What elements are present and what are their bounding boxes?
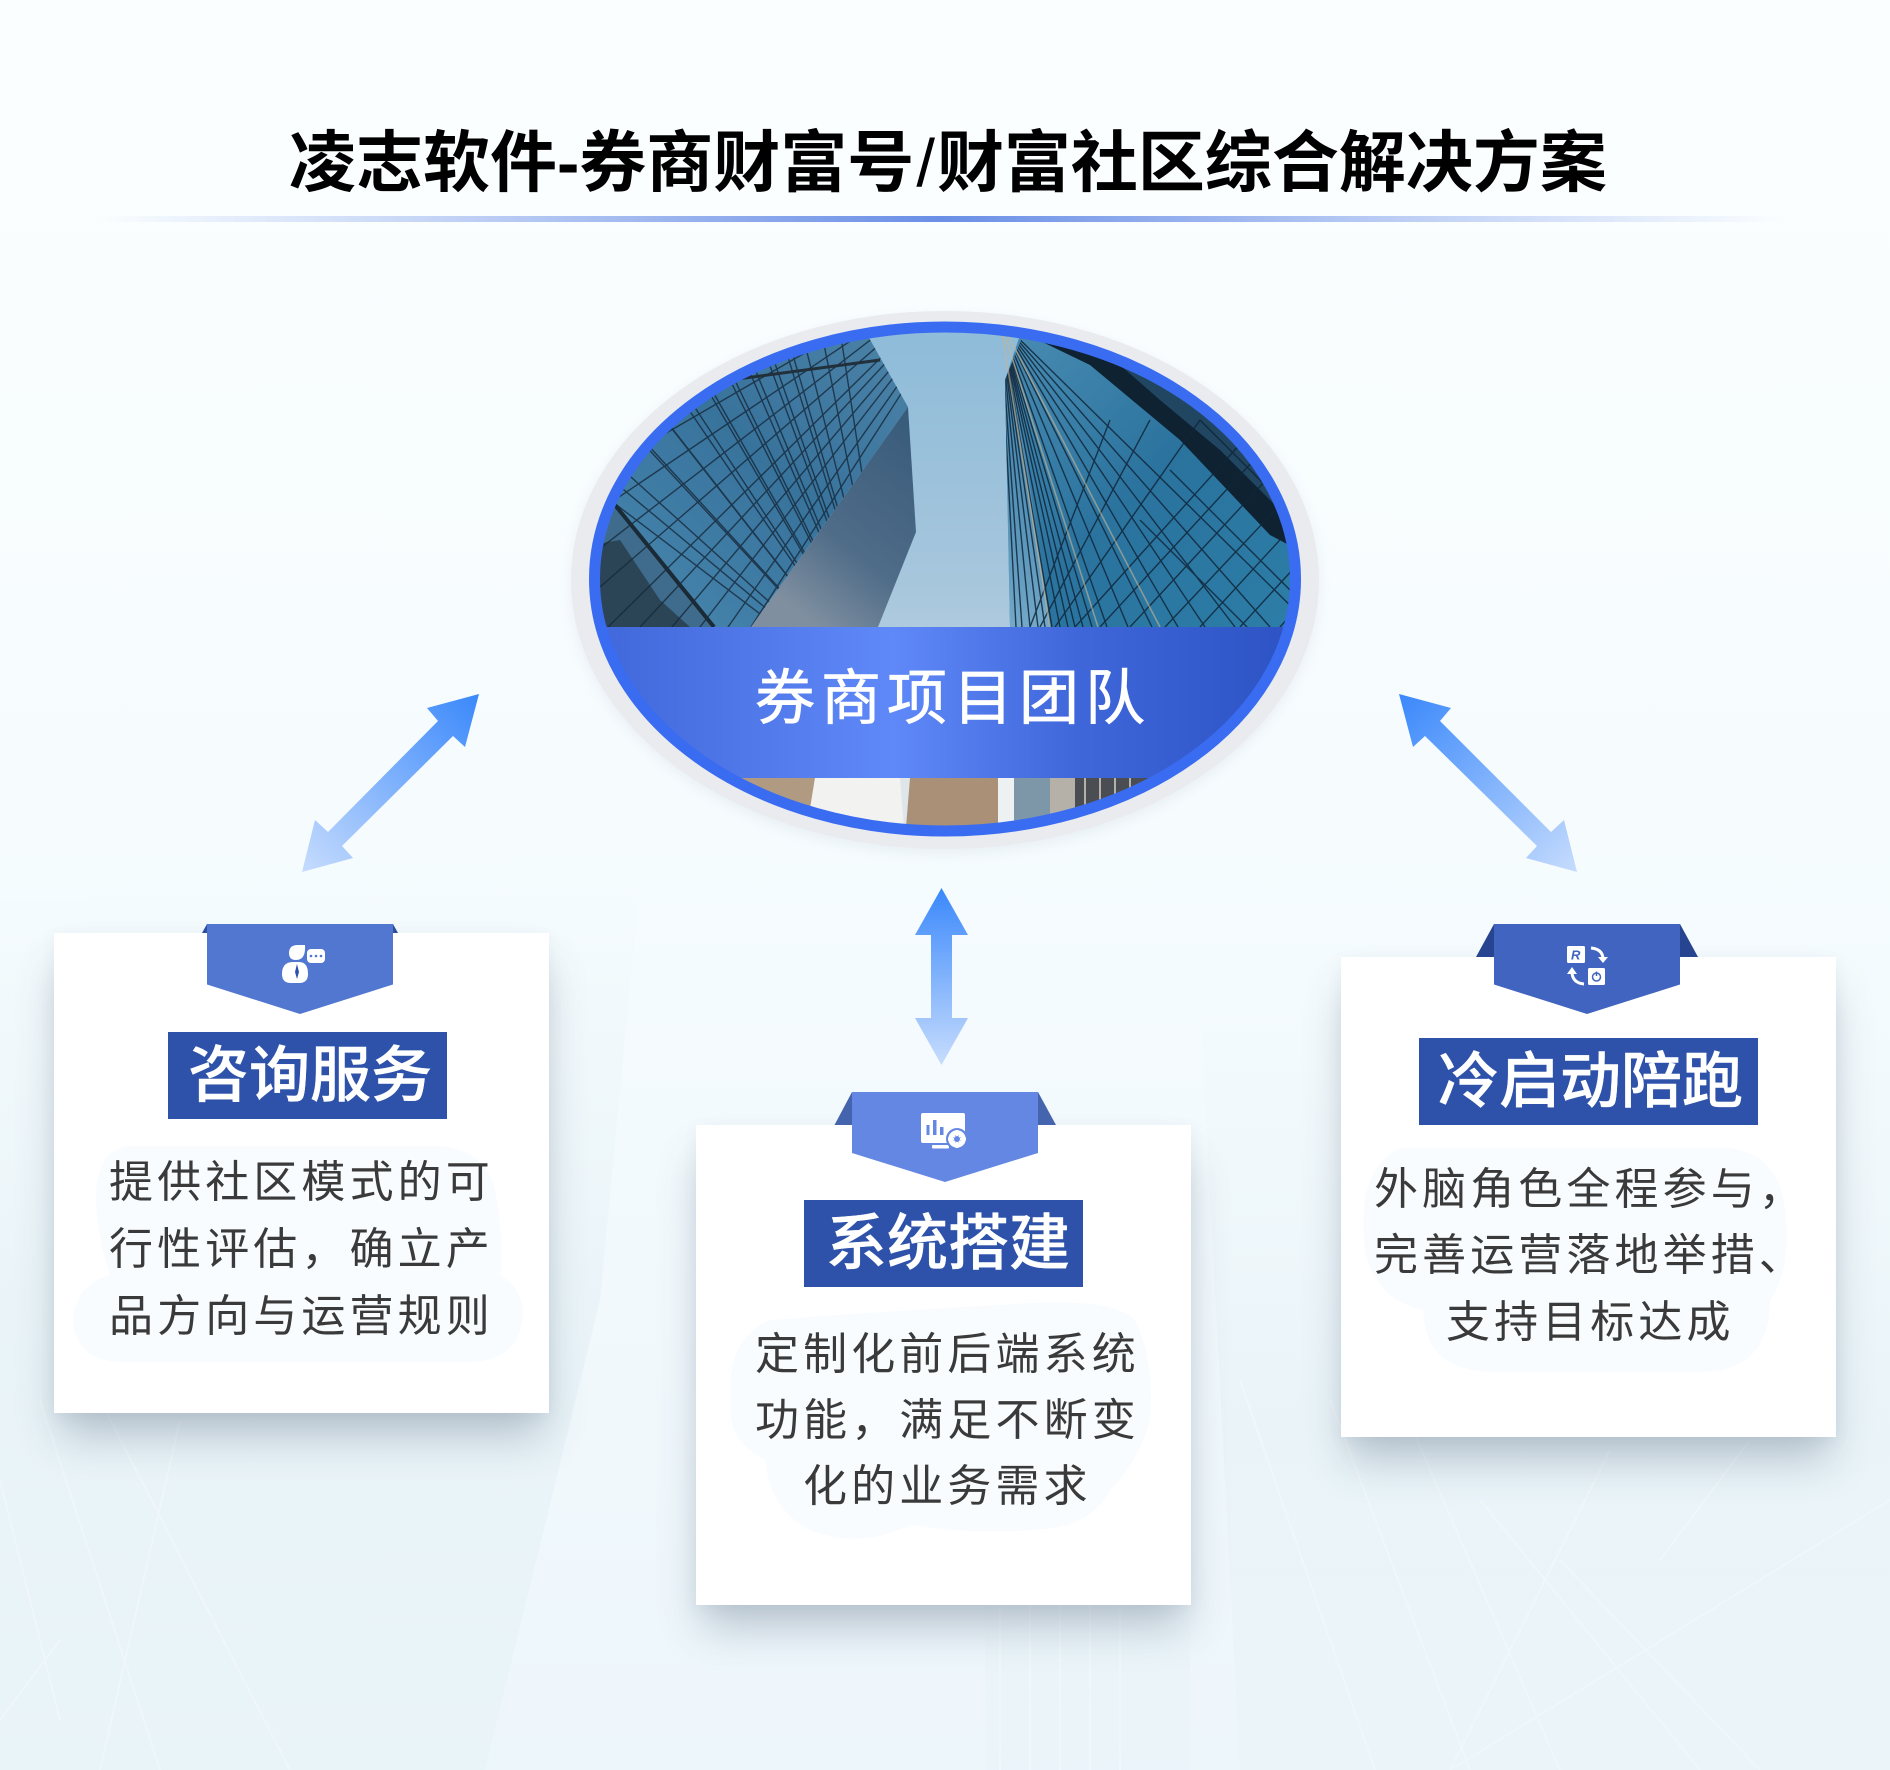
arrow: right double arrow bbox=[1399, 694, 1577, 872]
blue ring bbox=[594, 327, 1296, 831]
arrow: center double arrow bbox=[915, 888, 968, 1065]
body text: 完善运营落地举措、 bbox=[1374, 1231, 1807, 1280]
ribbon with dashboard icon bbox=[834, 1092, 1056, 1182]
icon: restart cycle: R bbox=[1571, 948, 1581, 962]
body text: 功能，满足不断变 bbox=[755, 1396, 1140, 1445]
banner: project team bbox=[580, 627, 1310, 778]
ellipse outer halo bbox=[570, 311, 1320, 855]
building photo bbox=[600, 332, 1290, 826]
body text: 外脑角色全程参与， bbox=[1374, 1165, 1807, 1214]
icon: person with speech bubble bbox=[282, 945, 325, 983]
body text: 定制化前后端系统 bbox=[755, 1330, 1140, 1379]
title: 凌志软件-券商财富号/财富社区综合解决方案 bbox=[289, 126, 1607, 201]
title underline bbox=[100, 216, 1780, 222]
panel: consulting service bbox=[38, 924, 566, 1458]
ribbon with restart icon bbox=[1476, 924, 1698, 1014]
panel: central project team ellipse bbox=[571, 311, 1319, 853]
body text bbox=[1374, 1165, 1807, 1347]
icon: restart cycle bbox=[1567, 946, 1608, 985]
arrow: left double arrow bbox=[302, 694, 479, 872]
body text bbox=[109, 1158, 494, 1341]
ribbon with person icon bbox=[202, 924, 398, 1014]
body text: 提供社区模式的可 bbox=[109, 1158, 494, 1207]
body text: 化的业务需求 bbox=[803, 1462, 1092, 1511]
heading: system construction bbox=[804, 1200, 1083, 1287]
heading: consulting service: 咨询服务 bbox=[188, 1041, 432, 1109]
banner text: 券商项目团队 bbox=[755, 665, 1151, 732]
heading: cold start support: 冷启动陪跑 bbox=[1438, 1047, 1743, 1115]
panel: cold start support bbox=[1324, 924, 1852, 1482]
body text: 支持目标达成 bbox=[1446, 1298, 1735, 1347]
body text: 行性评估，确立产 bbox=[109, 1225, 494, 1274]
icon: monitor with gear bbox=[921, 1113, 968, 1150]
body text: 品方向与运营规则 bbox=[109, 1292, 494, 1341]
heading: system construction: 系统搭建 bbox=[826, 1209, 1070, 1277]
panel: system construction bbox=[680, 1092, 1208, 1650]
heading: consulting service bbox=[168, 1032, 447, 1119]
body text bbox=[755, 1330, 1140, 1511]
